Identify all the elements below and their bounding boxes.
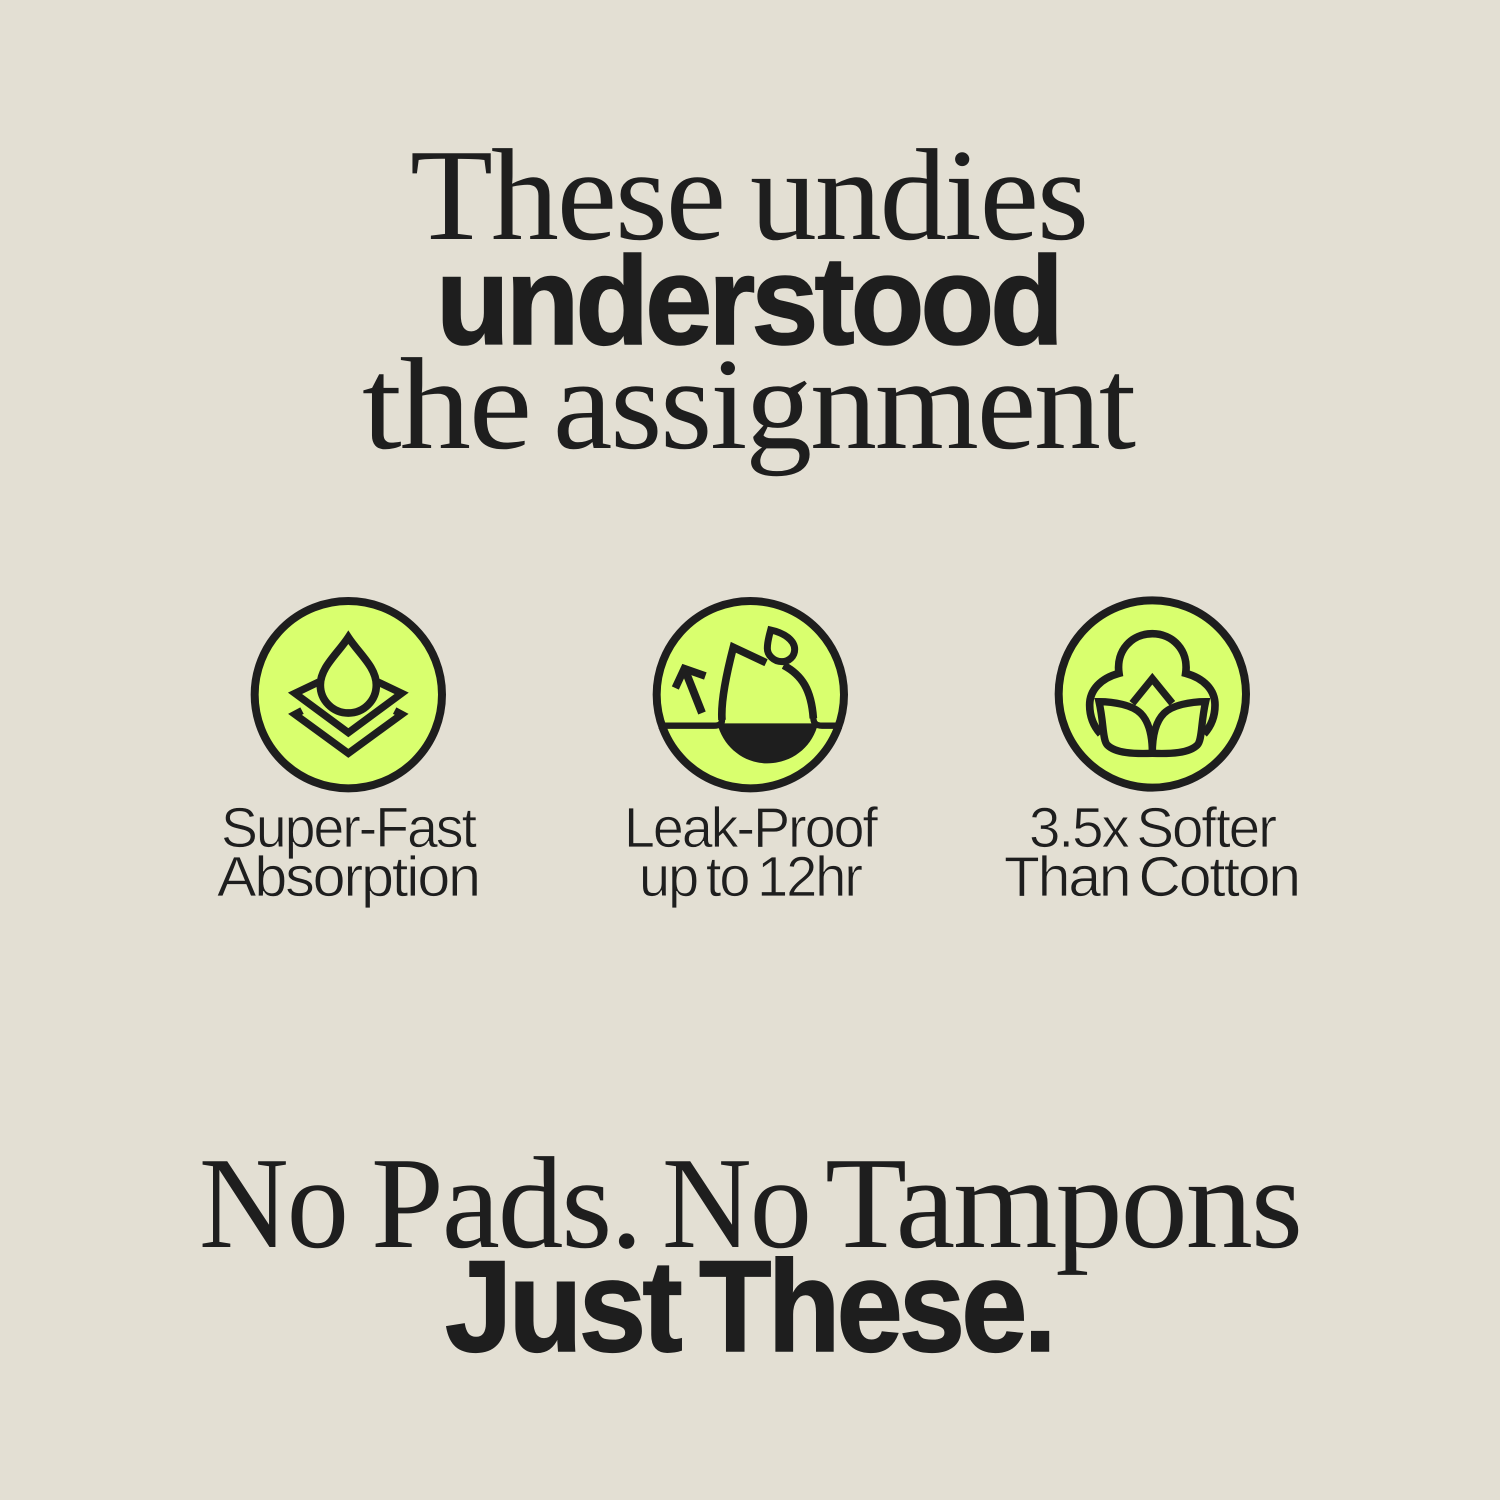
heading: the bbox=[362, 332, 530, 477]
closing tagline: These. bbox=[699, 1233, 1053, 1379]
heading: undies bbox=[750, 123, 1087, 268]
closing tagline: Tampons bbox=[825, 1131, 1301, 1276]
label: leak-proof up to 12hr: Leak-Proof bbox=[624, 796, 878, 860]
closing tagline: No bbox=[199, 1131, 347, 1276]
label: leak-proof up to 12hr bbox=[624, 796, 878, 909]
icon: leak-proof barrier bbox=[657, 601, 844, 788]
heading: These bbox=[410, 123, 724, 268]
closing tagline: Pads. bbox=[371, 1131, 641, 1276]
closing tagline: No bbox=[662, 1131, 810, 1276]
heading: assignment bbox=[553, 332, 1136, 477]
label: super-fast absorption: Super-Fast bbox=[221, 796, 477, 860]
label: 3.5x softer than cotton bbox=[1004, 796, 1299, 909]
label: 3.5x softer than cotton: 3.5x Softer bbox=[1029, 796, 1277, 860]
label: 3.5x softer than cotton: Than Cotton bbox=[1004, 845, 1299, 909]
label: leak-proof up to 12hr: up to 12hr bbox=[639, 845, 863, 909]
label: super-fast absorption: Absorption bbox=[217, 845, 479, 909]
closing tagline bbox=[199, 1131, 1301, 1379]
heading bbox=[362, 123, 1136, 477]
heading: understood bbox=[436, 232, 1060, 371]
icon: cotton boll bbox=[1059, 600, 1246, 788]
icon: water drop on absorbent layers bbox=[255, 601, 442, 788]
closing tagline: Just bbox=[445, 1233, 682, 1379]
label: super-fast absorption bbox=[217, 796, 479, 909]
